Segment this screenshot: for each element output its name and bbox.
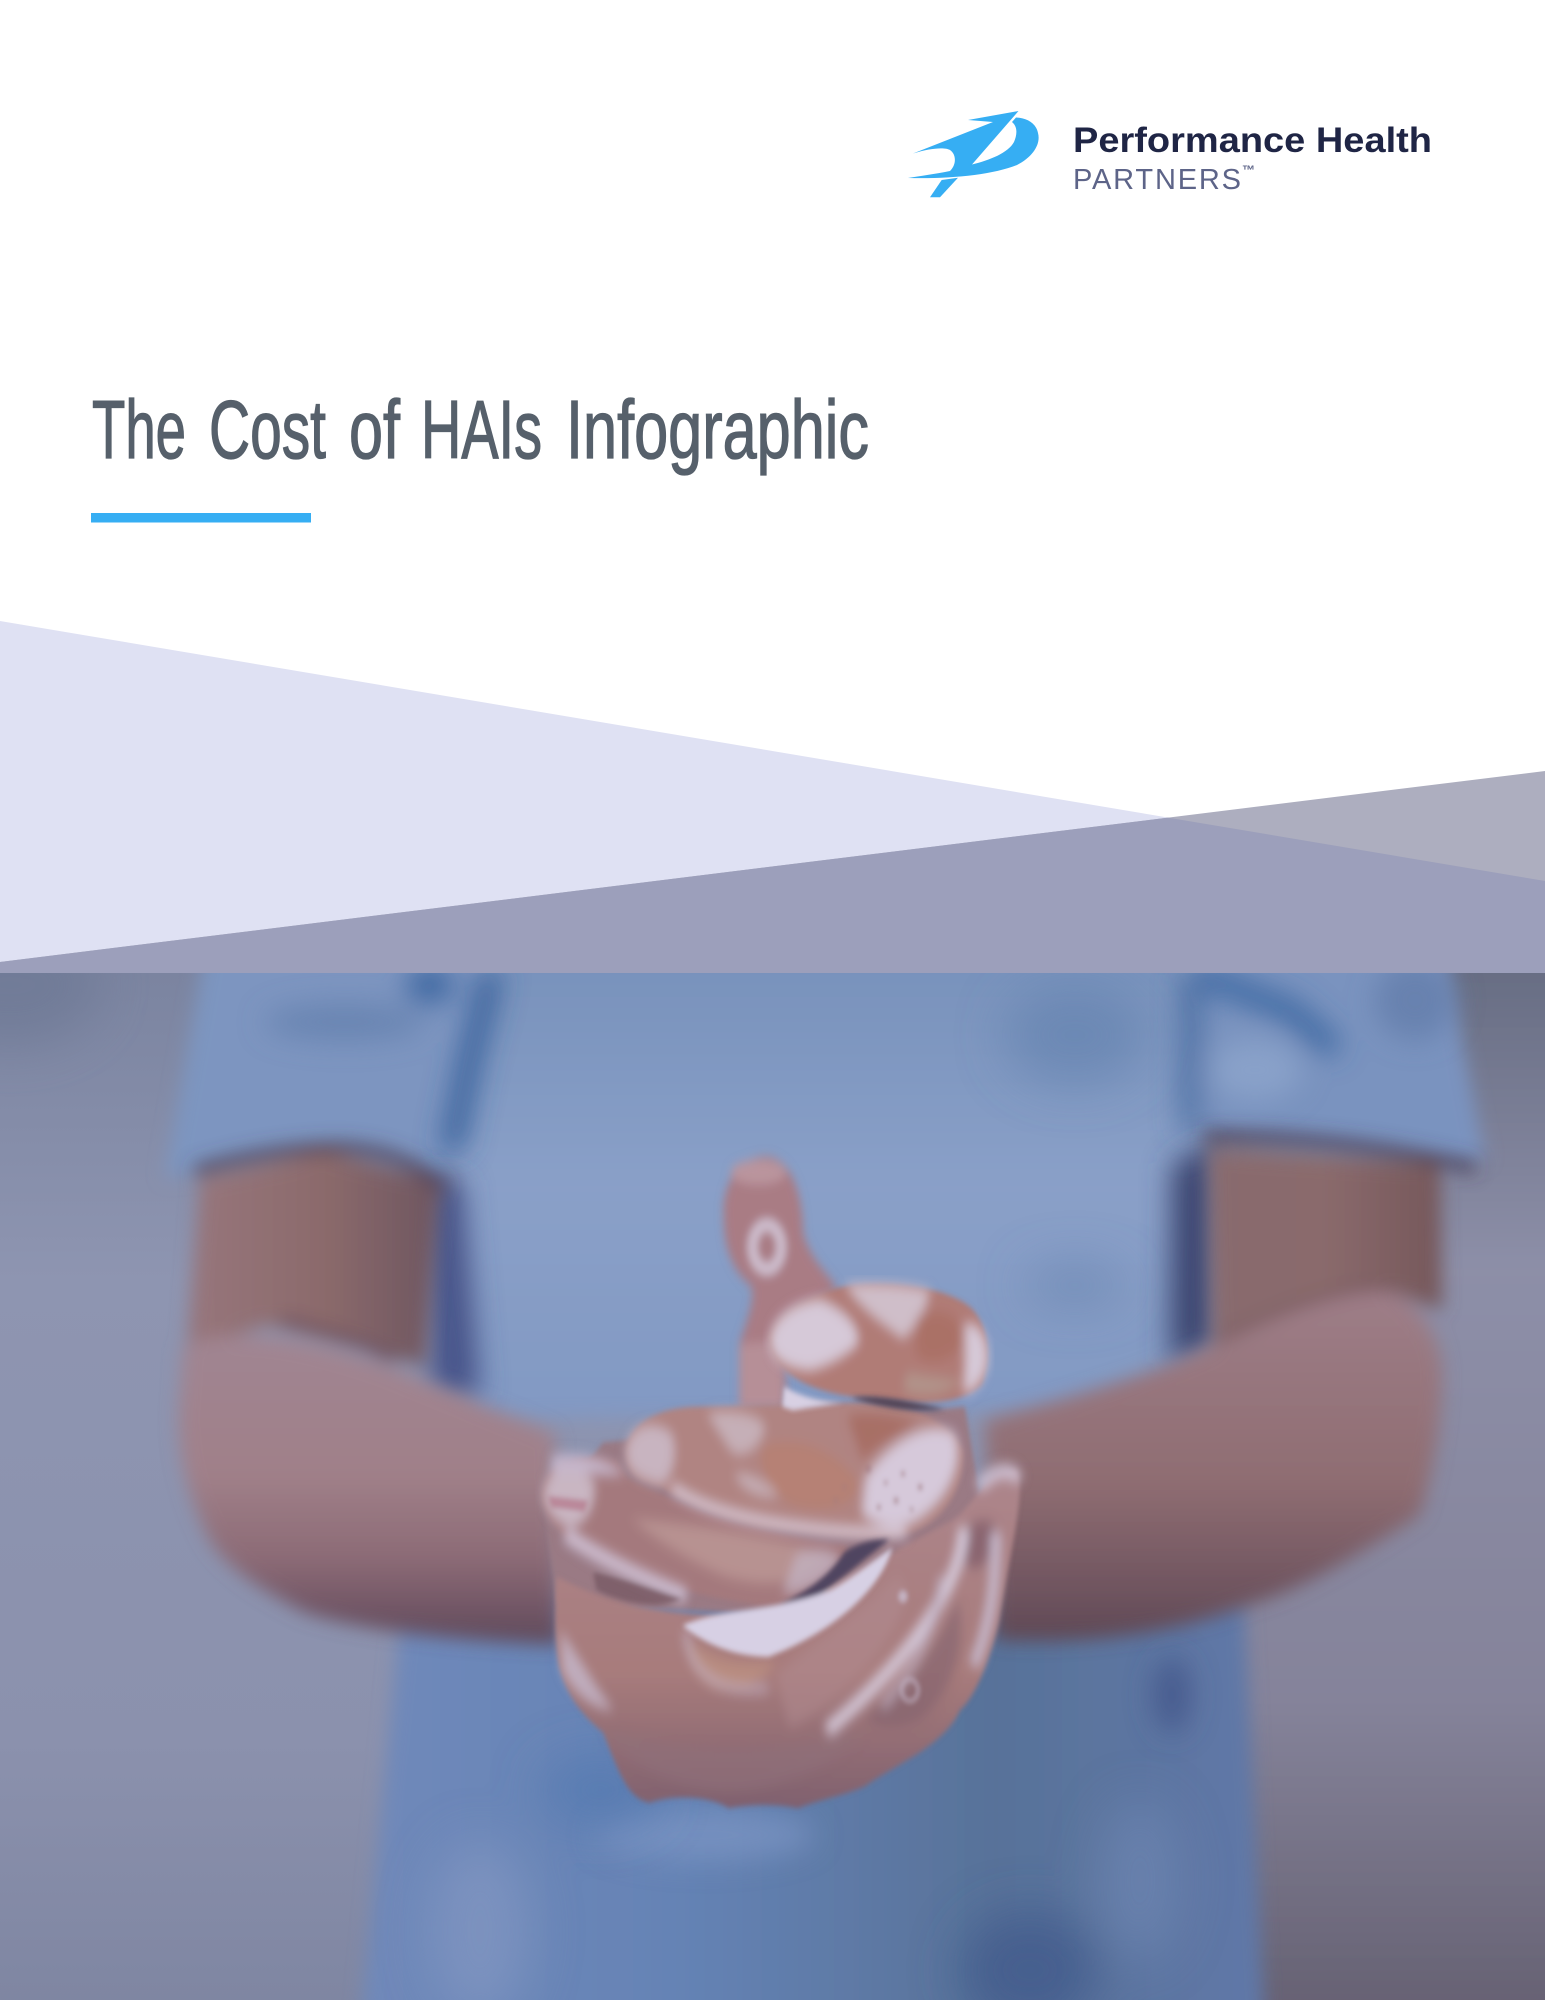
right arm [985,1137,1475,1641]
photo: hands being washed with soap [0,925,1545,2000]
logo wordmark: Performance Health: Performance Health [1073,121,1432,160]
photo background wall [0,925,1545,2000]
geometric banner [0,621,1545,973]
title: Infographic [566,383,869,476]
logo: Performance Health Partners [908,111,1432,197]
palm soft tones and foam [560,1471,1018,1791]
title: Cost [209,383,326,476]
icon: logo mark [908,111,1039,197]
left arm [179,1148,560,1645]
logo wordmark: Partners: PARTNERS [1073,164,1241,196]
shirt [165,950,1485,2000]
middle finger [626,1402,963,1537]
soap bubbles [866,1466,924,1513]
raised thumb [724,1157,838,1409]
trademark symbol: ™ [1242,162,1255,178]
foam and dark gaps between fingers [683,1387,944,1657]
photo: soapy hands [541,1157,1020,1808]
soft shirt tones [430,985,1180,2000]
accent bar [91,513,311,522]
arm shadows [425,1140,1215,1395]
lower hand palm [555,1469,1020,1808]
shirt folds [265,960,1455,1861]
lower finger [541,1454,855,1605]
top finger [769,1283,988,1402]
title: HAIs [421,383,542,476]
title: of [349,383,401,476]
title: The [92,383,186,476]
hand base [545,1407,982,1621]
